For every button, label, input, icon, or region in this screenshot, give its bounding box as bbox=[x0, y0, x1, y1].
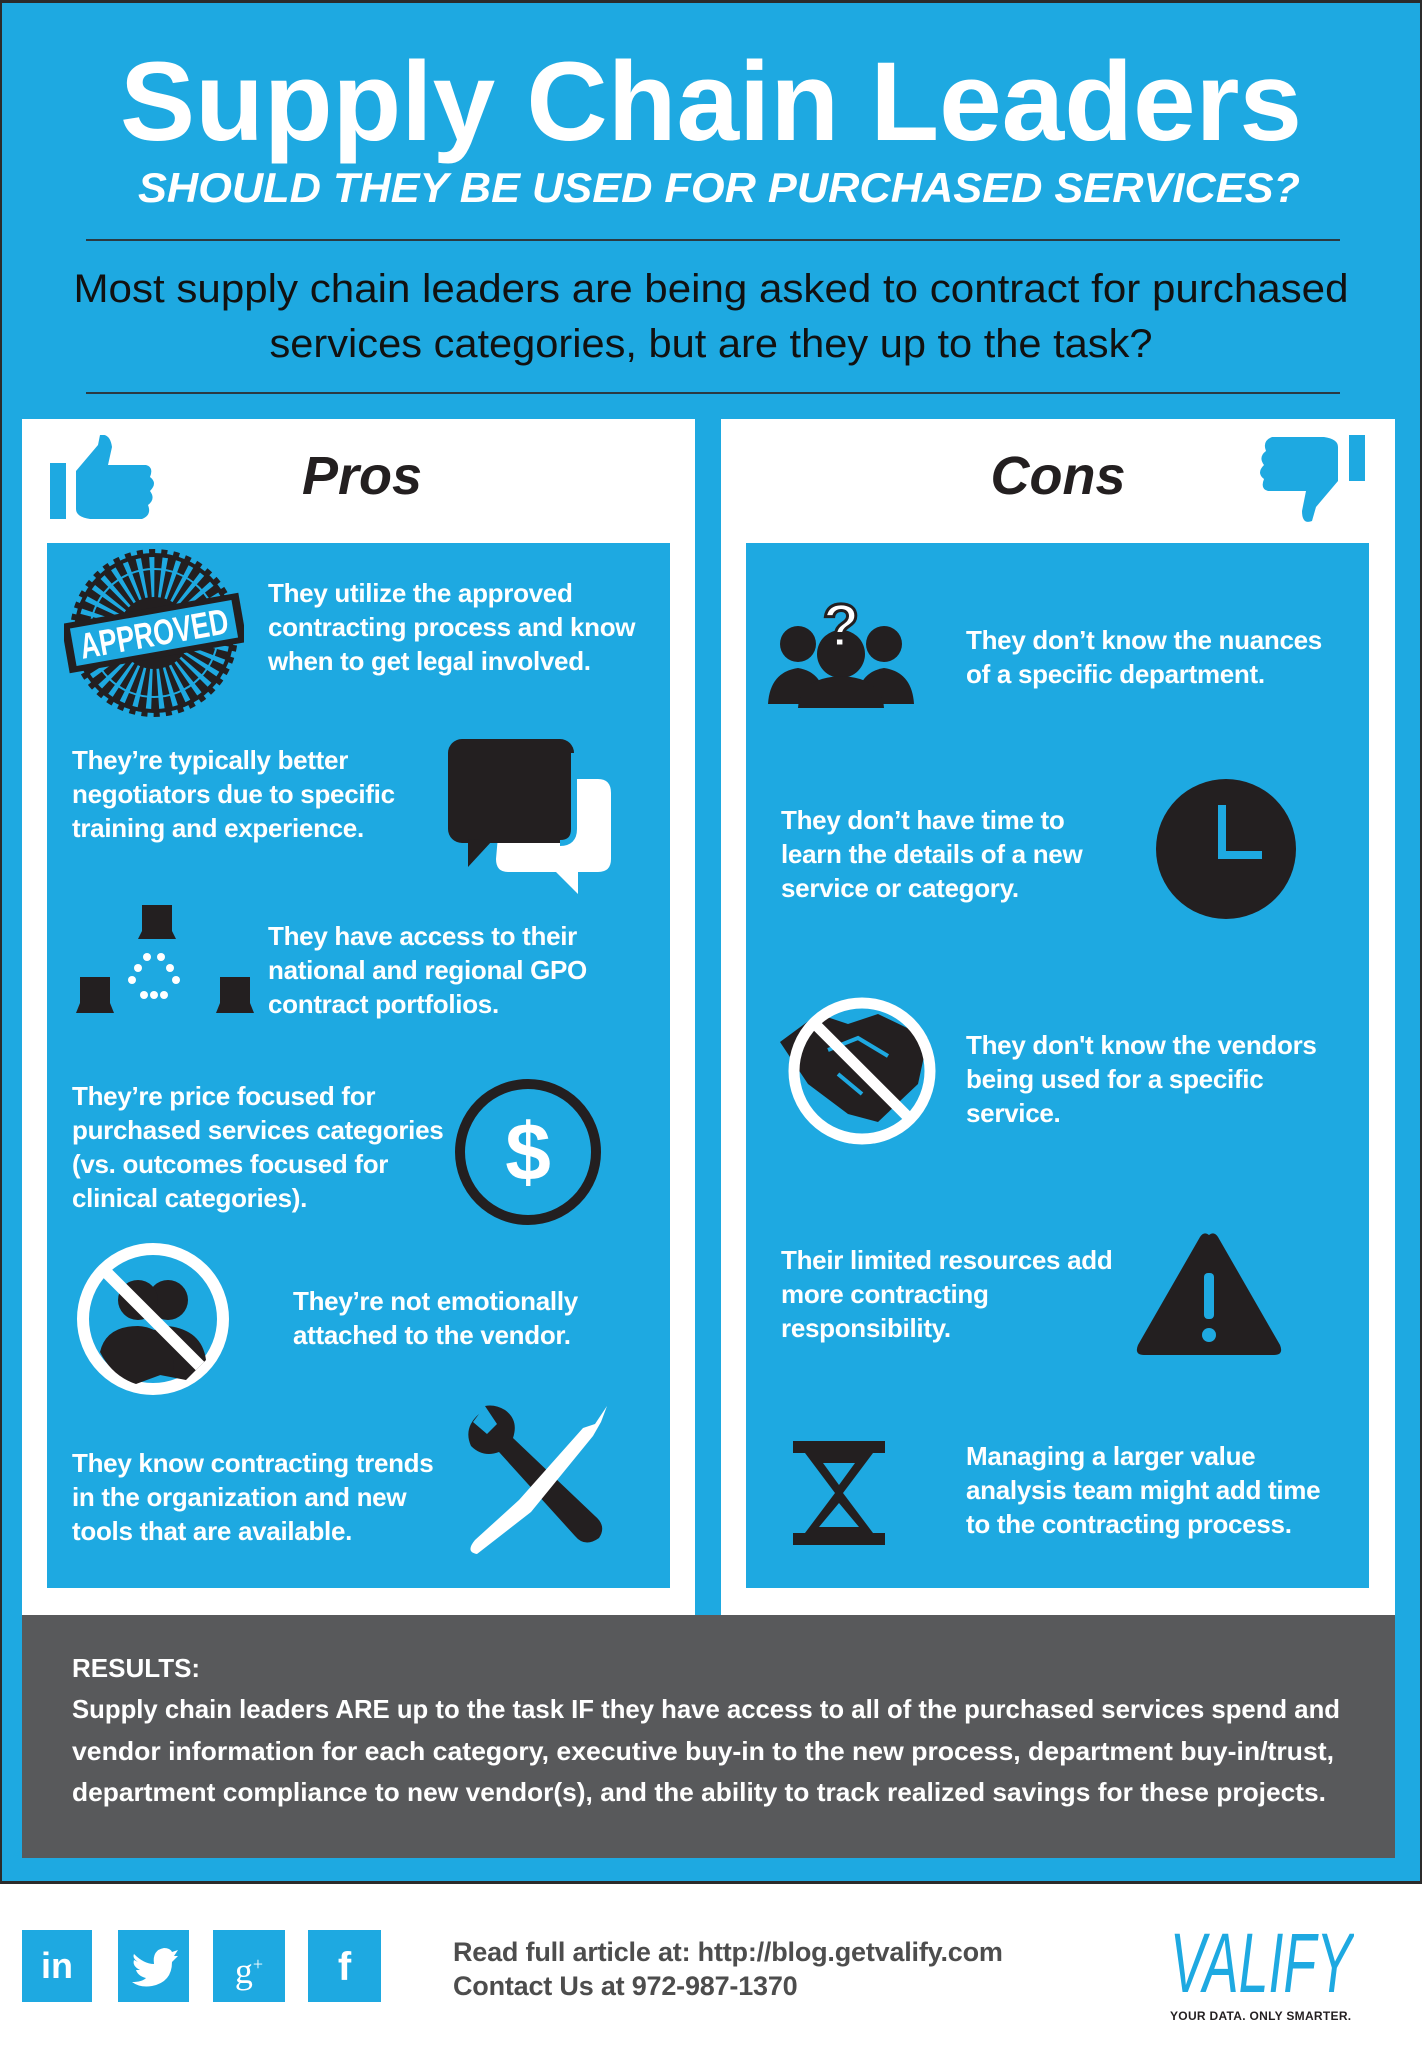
results text: vendor information for each category, executive buy-in to the new process, department buy-in/trust, bbox=[72, 1736, 1334, 1766]
text: pro 1: contracting process and know bbox=[268, 612, 635, 642]
icon: twitter bbox=[118, 1930, 189, 2002]
footer text: Contact Us at 972-987-1370 bbox=[453, 1971, 797, 2001]
text: con 2: They don’t have time to bbox=[781, 805, 1064, 835]
icon: thumbs up bbox=[50, 435, 154, 519]
title: Supply Chain Leaders bbox=[120, 39, 1302, 164]
text: con 5 bbox=[966, 1441, 1320, 1539]
icon: linkedin bbox=[22, 1930, 92, 2002]
text: con 4: more contracting bbox=[781, 1279, 989, 1309]
text: con 3 bbox=[966, 1030, 1317, 1128]
text: pro 1: when to get legal involved. bbox=[268, 646, 591, 676]
text: con 2: learn the details of a new bbox=[781, 839, 1082, 869]
text: pro 4: clinical categories). bbox=[72, 1183, 307, 1213]
text: con 5: to the contracting process. bbox=[966, 1509, 1292, 1539]
text: pro 6 bbox=[72, 1448, 433, 1546]
title: services categories, but are they up to the task? bbox=[270, 322, 1152, 366]
text: pro 2: They’re typically better bbox=[72, 745, 348, 775]
icon: linkedin: in bbox=[41, 1945, 73, 1986]
text: pro 3: national and regional GPO bbox=[268, 955, 587, 985]
text: con 1 bbox=[966, 625, 1322, 689]
icon: facebook bbox=[308, 1930, 381, 2002]
footer text bbox=[453, 1937, 1003, 2001]
text: pro 4: They’re price focused for bbox=[72, 1081, 375, 1111]
icon: people question bbox=[768, 594, 914, 708]
icon: GPO network bbox=[76, 905, 254, 1013]
results text bbox=[72, 1653, 1340, 1807]
heading: Pros: Pros bbox=[302, 446, 422, 506]
text: pro 2 bbox=[72, 745, 395, 843]
text: pro 3: They have access to their bbox=[268, 921, 577, 951]
panel: pros bbox=[22, 419, 695, 1615]
subtitle: SHOULD THEY BE USED FOR PURCHASED SERVICES? bbox=[138, 164, 1300, 211]
text: con 3: They don't know the vendors bbox=[966, 1030, 1317, 1060]
icon: no people bbox=[77, 1243, 229, 1395]
icon: hourglass bbox=[793, 1441, 885, 1545]
heading: Cons: Cons bbox=[990, 446, 1126, 506]
icon: approved badge bbox=[64, 549, 244, 717]
icon: thumbs down bbox=[1260, 435, 1365, 522]
text: pro 5 bbox=[293, 1286, 578, 1350]
text: con 2 bbox=[781, 805, 1083, 903]
icon: dollar bbox=[455, 1079, 601, 1225]
text: con 2: service or category. bbox=[781, 873, 1019, 903]
text: pro 4: purchased services categories bbox=[72, 1115, 443, 1145]
text: pro 3 bbox=[268, 921, 587, 1019]
icon: google plus: g+ bbox=[235, 1951, 263, 1991]
icon: people question: ? bbox=[823, 594, 859, 659]
text: con 1: of a specific department. bbox=[966, 659, 1265, 689]
pros inner box bbox=[47, 543, 670, 1588]
text: pro 5: attached to the vendor. bbox=[293, 1320, 571, 1350]
logo: VALIFY: YOUR DATA. ONLY SMARTER. bbox=[1170, 2009, 1351, 2023]
icon: clock bbox=[1156, 779, 1296, 919]
text: con 5: analysis team might add time bbox=[966, 1475, 1320, 1505]
text: pro 6: They know contracting trends bbox=[72, 1448, 433, 1478]
text: pro 6: in the organization and new bbox=[72, 1482, 406, 1512]
text: con 1: They don’t know the nuances bbox=[966, 625, 1322, 655]
icon: facebook: f bbox=[338, 1945, 351, 1989]
text: pro 4 bbox=[72, 1081, 443, 1213]
text: pro 5: They’re not emotionally bbox=[293, 1286, 578, 1316]
panel: results bbox=[22, 1615, 1395, 1858]
text: pro 4: (vs. outcomes focused for bbox=[72, 1149, 388, 1179]
footer text: Read full article at: http://blog.getvalify.com bbox=[453, 1937, 1003, 1967]
title bbox=[74, 39, 1348, 394]
panel: cons bbox=[721, 419, 1395, 1615]
text: con 4: responsibility. bbox=[781, 1313, 951, 1343]
results text: Supply chain leaders ARE up to the task IF they have access to all of the purchased services spend and bbox=[72, 1694, 1340, 1724]
results text: department compliance to new vendor(s), and the ability to track realized savings for these projects. bbox=[72, 1777, 1326, 1807]
results text: RESULTS: bbox=[72, 1653, 200, 1683]
text: con 4 bbox=[781, 1245, 1112, 1343]
text: con 3: service. bbox=[966, 1098, 1060, 1128]
icon: tools bbox=[468, 1406, 607, 1554]
text: con 3: being used for a specific bbox=[966, 1064, 1263, 1094]
intro text: Most supply chain leaders are being asked to contract for purchased bbox=[74, 267, 1348, 311]
text: pro 2: training and experience. bbox=[72, 813, 364, 843]
icon: no handshake bbox=[780, 998, 936, 1144]
text: pro 1 bbox=[268, 578, 636, 676]
text: con 4: Their limited resources add bbox=[781, 1245, 1112, 1275]
cons inner box bbox=[746, 543, 1369, 1588]
text: pro 3: contract portfolios. bbox=[268, 989, 499, 1019]
text: con 5: Managing a larger value bbox=[966, 1441, 1255, 1471]
text: pro 1: They utilize the approved bbox=[268, 578, 573, 608]
icon: warning bbox=[1136, 1233, 1282, 1355]
footer: social icons bbox=[22, 1930, 381, 2002]
text: pro 2: negotiators due to specific bbox=[72, 779, 395, 809]
text: pro 6: tools that are available. bbox=[72, 1516, 352, 1546]
icon: google plus bbox=[213, 1930, 285, 2002]
icon: chat bubbles bbox=[448, 739, 611, 894]
icon: dollar: $ bbox=[505, 1107, 551, 1198]
